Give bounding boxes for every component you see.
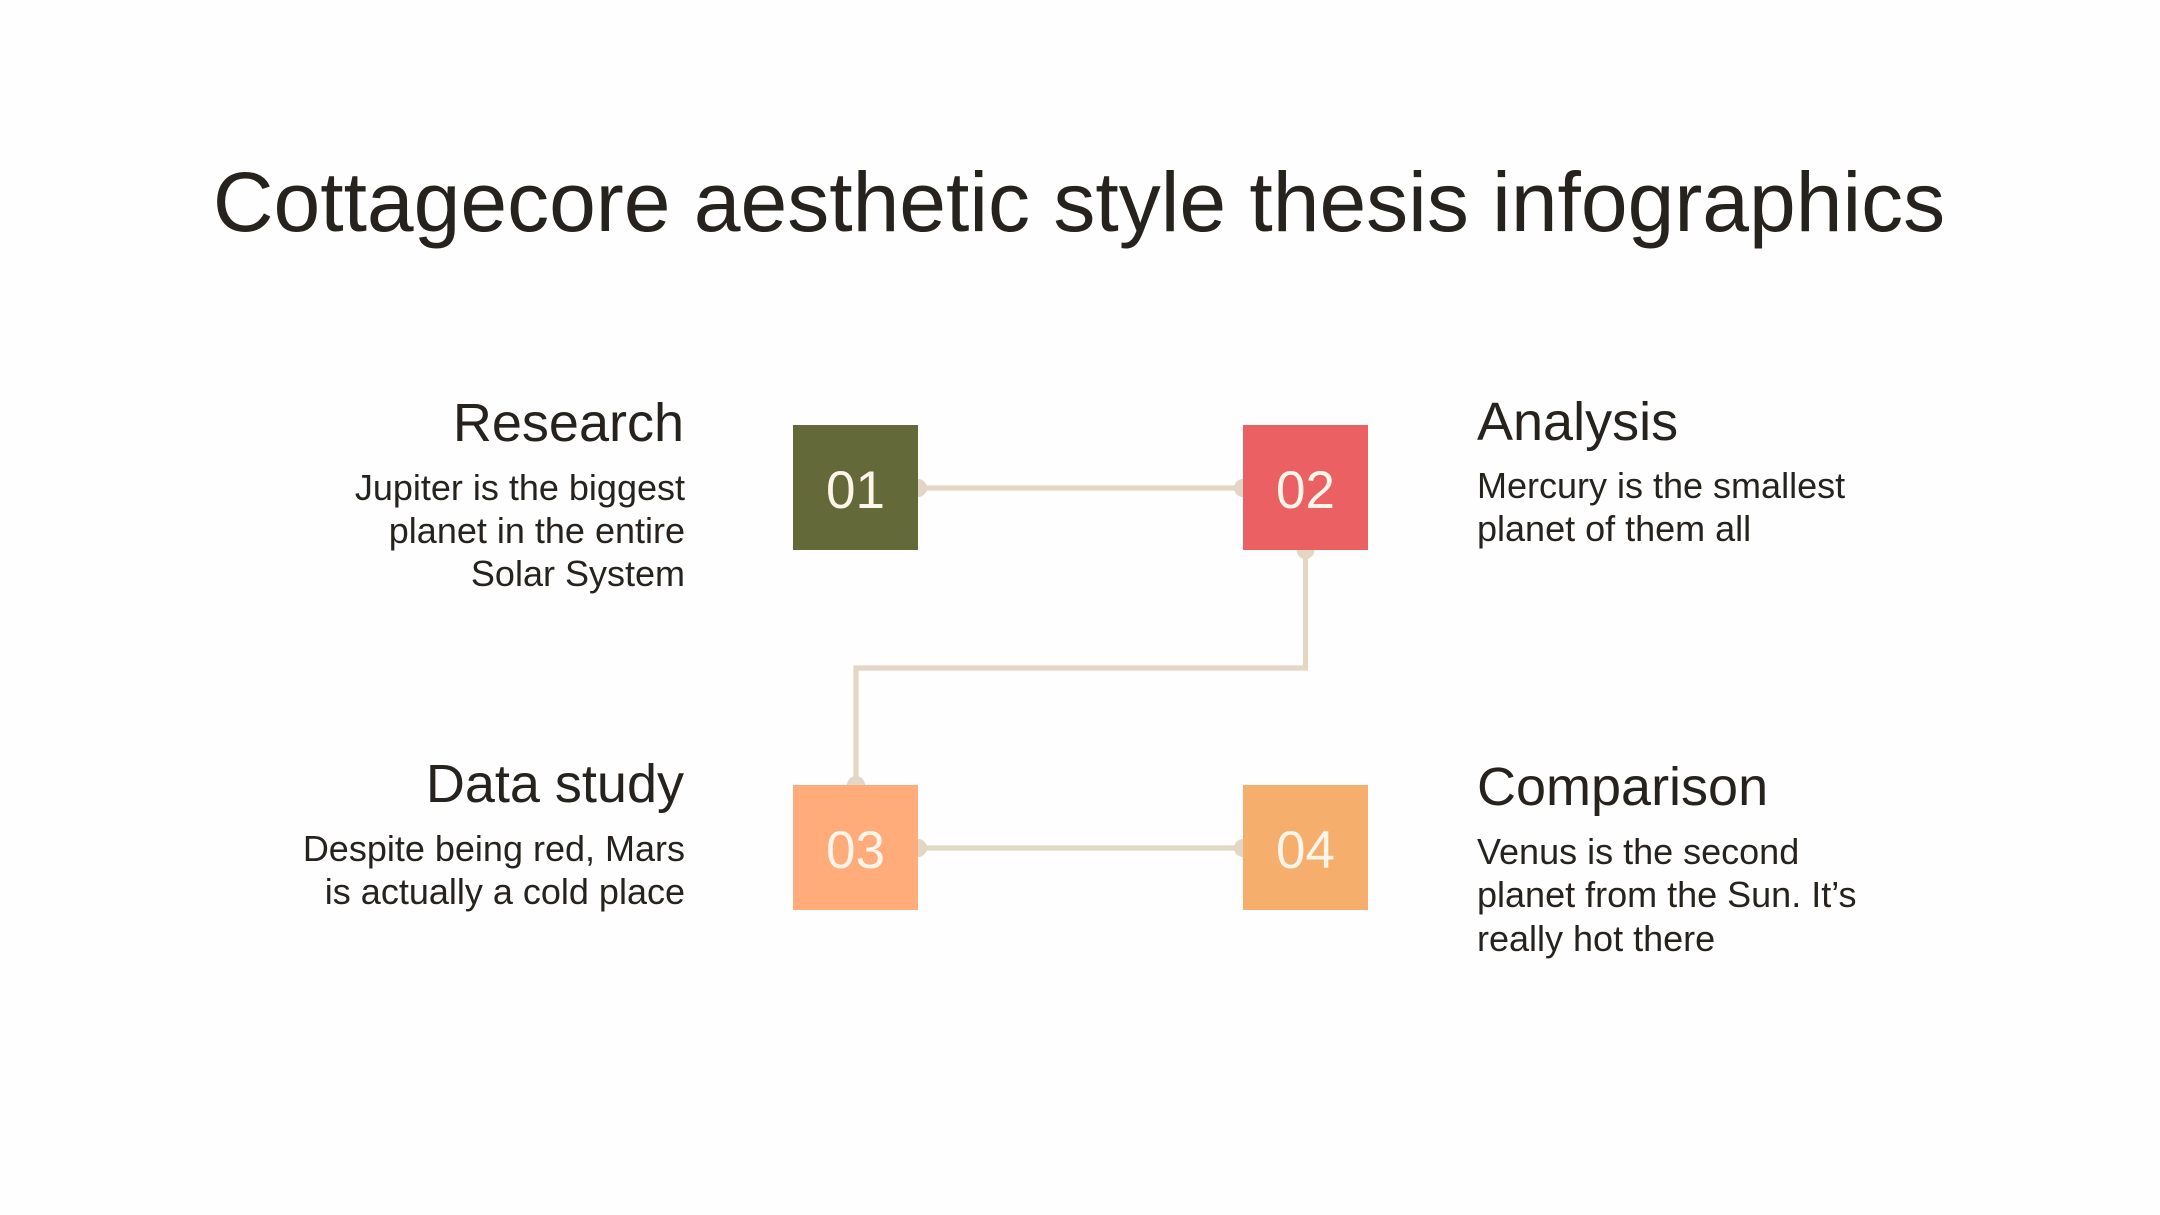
text block: Analysis: planet of them all xyxy=(1477,508,1751,549)
text block: Research xyxy=(355,393,685,594)
step 04 box xyxy=(1243,785,1368,910)
text block: Data study: Data study xyxy=(426,754,684,814)
text block: Comparison: Comparison xyxy=(1477,757,1768,817)
text block: Research: Research xyxy=(453,393,684,453)
title: Cottagecore aesthetic style thesis infographics xyxy=(213,155,1945,249)
text block: Data study: Despite being red, Mars xyxy=(303,828,685,869)
text block: Analysis: Mercury is the smallest xyxy=(1477,465,1845,506)
connector: 03 to 04 xyxy=(909,839,1252,857)
step 01 box xyxy=(793,425,918,550)
text block: Research: Solar System xyxy=(471,553,685,594)
text block: Analysis: Analysis xyxy=(1477,392,1678,452)
text block: Data study xyxy=(303,754,685,912)
step 02 box: 02 xyxy=(1276,461,1335,520)
step 03 box xyxy=(793,785,918,910)
text block: Data study: is actually a cold place xyxy=(325,871,685,912)
step 01 box: 01 xyxy=(826,461,885,520)
text block: Comparison: Venus is the second xyxy=(1477,831,1799,872)
connector: 02 to 03 xyxy=(847,541,1314,794)
step 03 box: 03 xyxy=(826,821,885,880)
text block: Research: planet in the entire xyxy=(389,510,685,551)
text block: Research: Jupiter is the biggest xyxy=(355,467,685,508)
text block: Comparison xyxy=(1477,757,1857,959)
step 02 box xyxy=(1243,425,1368,550)
step 04 box: 04 xyxy=(1276,821,1335,880)
text block: Comparison: planet from the Sun. It’s xyxy=(1477,874,1857,915)
text block: Comparison: really hot there xyxy=(1477,918,1715,959)
connector: 01 to 02 xyxy=(909,479,1252,497)
text block: Analysis xyxy=(1477,392,1845,549)
